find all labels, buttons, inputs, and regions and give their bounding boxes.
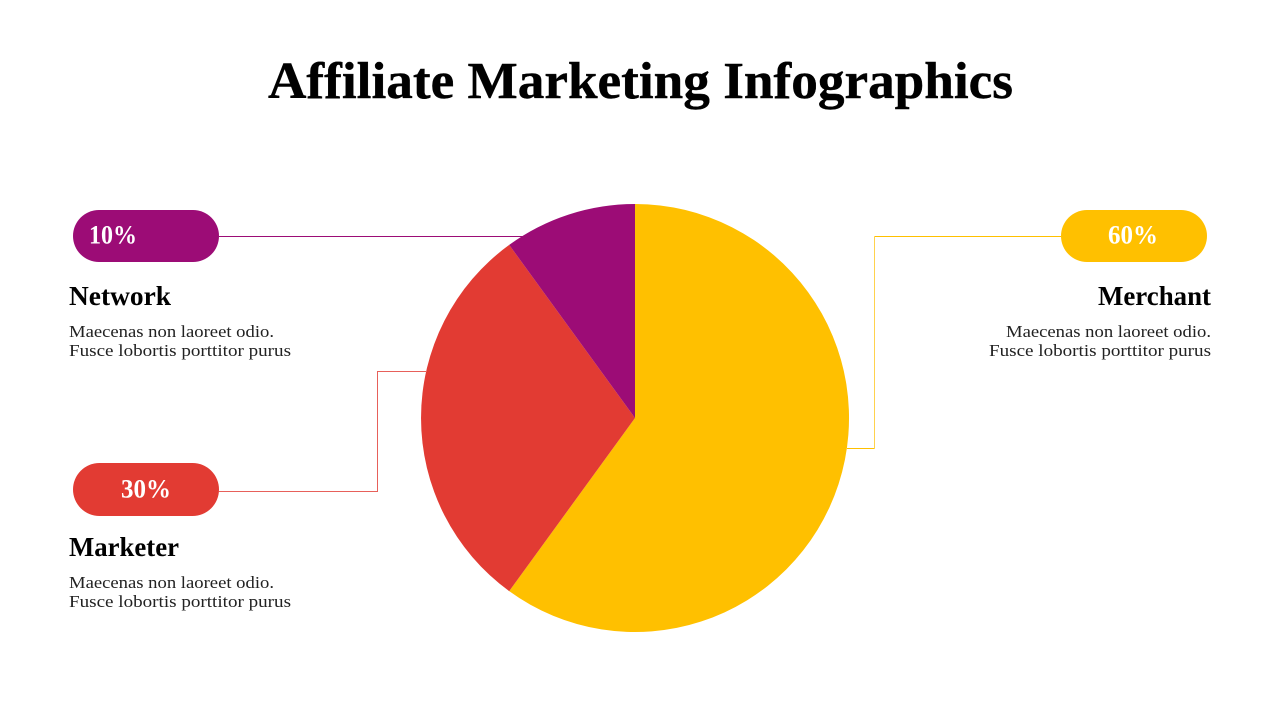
pie chart — [421, 204, 849, 632]
badge: 60% — [1061, 210, 1207, 262]
text: network description: Fusce lobortis porttitor purus — [69, 341, 291, 360]
text: merchant description: Maecenas non laoreet odio. — [1006, 322, 1211, 341]
text: marketer description: Fusce lobortis porttitor purus — [69, 592, 291, 611]
pie slice: merchant 60% — [509, 204, 849, 632]
badge: 60%: 60% — [1108, 220, 1158, 250]
panel: marketer — [69, 463, 291, 611]
text: marketer description: Maecenas non laoreet odio. — [69, 573, 274, 592]
badge: 10% — [73, 210, 219, 262]
connector: merchant — [847, 236, 1061, 448]
badge: 10%: 10% — [89, 220, 137, 250]
connector: marketer — [219, 372, 427, 492]
pie slice: network 10% — [509, 204, 635, 418]
connector: network — [219, 236, 524, 238]
panel: network — [69, 210, 291, 360]
heading: merchant: Merchant — [1098, 281, 1211, 311]
badge: 30% — [73, 463, 219, 516]
badge: 30%: 30% — [121, 474, 171, 504]
text: merchant description: Fusce lobortis porttitor purus — [989, 341, 1211, 360]
heading: marketer: Marketer — [69, 532, 179, 562]
title: Affiliate Marketing Infographics — [268, 53, 1013, 110]
text: network description: Maecenas non laoreet odio. — [69, 322, 274, 341]
pie slice: marketer 30% — [421, 245, 635, 591]
panel: merchant — [989, 210, 1211, 360]
heading: network: Network — [69, 281, 171, 311]
